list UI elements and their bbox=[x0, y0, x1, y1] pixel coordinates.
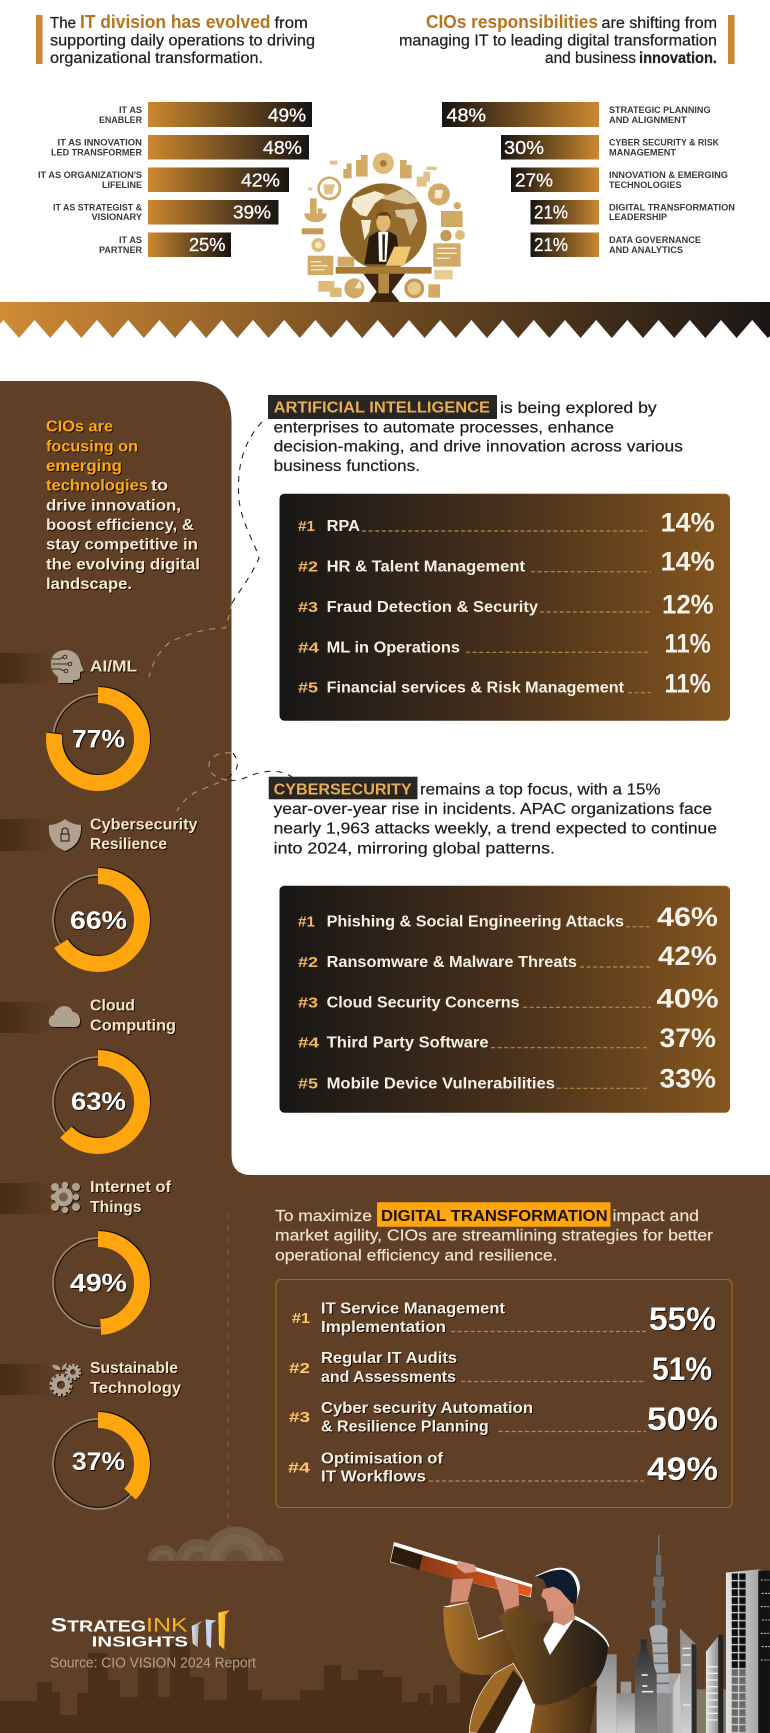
skyline silhouette bbox=[0, 1643, 490, 1733]
row: Mobile 33%: 33% bbox=[660, 1063, 716, 1093]
row: Fraud 12%: Fraud Detection & Security bbox=[327, 599, 538, 616]
text block: digital transformation: DIGITAL TRANSFORMATION bbox=[381, 1208, 608, 1225]
bar: cyber security 30%: MANAGEMENT bbox=[609, 148, 677, 158]
text block: digital transformation: market agility, CIOs are streamlining strategies for better bbox=[275, 1228, 713, 1245]
row: IT audits 51% bbox=[289, 1350, 712, 1387]
row: ML 11%: ML in Operations bbox=[327, 639, 460, 656]
row: IT service management 55%: 55% bbox=[649, 1301, 716, 1337]
row: Financial 11%: #5 bbox=[298, 680, 318, 697]
row: optimisation of IT workflows 49%: 49% bbox=[647, 1451, 718, 1487]
header: CIOs responsibilities shifting: CIOs responsibilities bbox=[426, 12, 598, 32]
text block: cybersecurity: nearly 1,963 attacks weekly, a trend expected to continue bbox=[274, 821, 717, 838]
row: Phishing 46%: 46% bbox=[657, 902, 718, 932]
row: Phishing 46% bbox=[298, 902, 718, 932]
text block: digital transformation: To maximize bbox=[275, 1208, 372, 1225]
panel: cybersecurity threats bbox=[280, 886, 730, 1113]
bar: digital transformation 21%: 21% bbox=[534, 202, 568, 223]
bar: data governance 21% bbox=[530, 232, 701, 257]
icon: gears and leaf bbox=[51, 1363, 80, 1395]
ring: 77% bbox=[53, 694, 143, 784]
vertical dashed divider bbox=[227, 1213, 229, 1529]
header: IT division evolved: The bbox=[50, 15, 76, 32]
row: HR 14%: 14% bbox=[661, 546, 715, 576]
intro text: emerging technologies: boost efficiency, & bbox=[46, 517, 194, 534]
bar: IT as partner 25%: PARTNER bbox=[99, 245, 143, 255]
row: cyber security automation 50%: Cyber security Automation bbox=[321, 1400, 533, 1417]
row: optimisation of IT workflows 49% bbox=[288, 1451, 718, 1487]
bar: innovation 27%: 27% bbox=[515, 170, 553, 190]
row: IT service management 55% bbox=[292, 1301, 716, 1337]
row: Cloud security 40% bbox=[298, 984, 718, 1014]
row: cyber security automation 50%: #3 bbox=[289, 1409, 310, 1426]
bar: data governance 21%: DATA GOVERNANCE bbox=[609, 235, 701, 245]
bar: strategic planning 48%: STRATEGIC PLANNING bbox=[609, 105, 711, 115]
bar: IT as organization's lifeline 42%: LIFELINE bbox=[102, 180, 142, 190]
row: Financial 11%: 11% bbox=[664, 669, 711, 699]
icon: IoT nodes bbox=[51, 1182, 80, 1213]
intro text: emerging technologies: landscape. bbox=[46, 576, 132, 593]
donut block: Cybersecurity Resilience 66%: Resilience bbox=[90, 836, 167, 853]
text block: cybersecurity: remains a top focus, with a 15% bbox=[420, 781, 661, 798]
ring: 37%: 37% bbox=[72, 1448, 125, 1476]
text block: cybersecurity: CYBERSECURITY bbox=[274, 781, 412, 798]
coat bbox=[443, 1602, 609, 1733]
bar: strategic planning 48%: AND ALIGNMENT bbox=[609, 115, 687, 125]
row: optimisation of IT workflows 49%: IT Workflows bbox=[321, 1469, 426, 1486]
icon: AI head bbox=[51, 650, 84, 683]
bar: digital transformation 21%: LEADERSHIP bbox=[609, 212, 667, 222]
logo: StrategINK Insights: INK bbox=[146, 1615, 188, 1637]
bar: data governance 21%: 21% bbox=[534, 234, 568, 255]
ring: 37% bbox=[53, 1419, 143, 1509]
row: Third party 37%: 37% bbox=[660, 1023, 716, 1053]
row: ML 11% bbox=[298, 629, 711, 659]
text block: artificial intelligence: enterprises to automate processes, enhance bbox=[274, 419, 614, 436]
bar: cyber security 30%: 30% bbox=[504, 137, 544, 158]
row: Third party 37%: #4 bbox=[298, 1035, 320, 1052]
donut block: Internet of Things 49% bbox=[0, 1179, 172, 1328]
bar: innovation 27%: INNOVATION & EMERGING bbox=[609, 170, 728, 180]
row: Mobile 33%: #5 bbox=[298, 1075, 318, 1092]
decorative cloud arcs bbox=[148, 1526, 284, 1561]
bar: strategic planning 48%: 48% bbox=[446, 104, 486, 126]
panel: AI use cases bbox=[280, 494, 730, 721]
row: RPA 14%: 14% bbox=[661, 508, 715, 538]
row: IT audits 51%: Regular IT Audits bbox=[321, 1350, 457, 1367]
ring: 49% bbox=[53, 1238, 143, 1328]
telescope bbox=[390, 1542, 532, 1597]
row: Cloud security 40%: Cloud Security Concerns bbox=[327, 994, 520, 1011]
text block: digital transformation: impact and bbox=[612, 1208, 699, 1225]
logo: StrategINK Insights: INSIGHTS bbox=[92, 1634, 188, 1650]
intro text: emerging technologies: emerging bbox=[46, 458, 122, 475]
row: cyber security automation 50%: & Resilience Planning bbox=[321, 1418, 489, 1435]
row: IT service management 55%: #1 bbox=[292, 1310, 310, 1327]
icon: shield bbox=[49, 819, 81, 851]
row: Third party 37% bbox=[298, 1023, 716, 1053]
donut block: Sustainable Technology 37%: Technology bbox=[90, 1380, 181, 1397]
intro text: emerging technologies: the evolving digital bbox=[46, 556, 200, 573]
header: CIOs responsibilities shifting: managing IT to leading digital transformation bbox=[399, 32, 717, 50]
row: Ransomware 42%: #2 bbox=[298, 954, 318, 971]
panel: digital transformation strategies bbox=[276, 1280, 732, 1508]
row: cyber security automation 50% bbox=[289, 1400, 718, 1437]
row: Financial 11%: Financial services & Risk Management bbox=[327, 680, 624, 697]
intro text: emerging technologies: drive innovation, bbox=[46, 497, 181, 514]
bar: IT as organization's lifeline 42% bbox=[38, 168, 289, 192]
row: Mobile 33% bbox=[298, 1063, 716, 1093]
row: Mobile 33%: Mobile Device Vulnerabilities bbox=[327, 1075, 555, 1092]
bar: cyber security 30% bbox=[501, 135, 720, 160]
logo: StrategINK Insights bbox=[51, 1610, 230, 1650]
row: Cloud security 40%: #3 bbox=[298, 994, 318, 1011]
text block: digital transformation bbox=[275, 1202, 713, 1264]
ring: 49%: 49% bbox=[70, 1269, 127, 1297]
bar: data governance 21%: AND ANALYTICS bbox=[609, 245, 683, 255]
row: Ransomware 42%: 42% bbox=[658, 941, 717, 971]
bar: innovation 27% bbox=[511, 168, 728, 192]
text block: artificial intelligence: business functions. bbox=[274, 458, 420, 475]
illustration: city skyscrapers bbox=[597, 1535, 770, 1733]
row: IT audits 51%: #2 bbox=[289, 1360, 310, 1377]
header: IT division evolved: supporting daily operations to driving bbox=[50, 32, 315, 50]
row: IT audits 51%: and Assessments bbox=[321, 1369, 456, 1386]
bar chart: CIO responsibilities bbox=[442, 102, 735, 257]
row: Cloud security 40%: 40% bbox=[656, 984, 718, 1014]
row: ML 11%: #4 bbox=[298, 639, 320, 656]
ring: 63% bbox=[53, 1057, 143, 1147]
bar: IT as innovation led transformer 48%: LED TRANSFORMER bbox=[51, 148, 143, 158]
row: Ransomware 42% bbox=[298, 941, 717, 971]
row: IT service management 55%: Implementation bbox=[321, 1319, 446, 1336]
intro text: emerging technologies: technologies bbox=[46, 478, 148, 495]
header: CIOs responsibilities shifting: and business bbox=[545, 50, 636, 67]
illustration: man with telescope bbox=[390, 1542, 609, 1733]
text block: cybersecurity: into 2024, mirroring global patterns. bbox=[274, 840, 555, 857]
ring: 66%: 66% bbox=[70, 907, 127, 935]
zigzag divider band bbox=[0, 302, 770, 338]
donut block: Cybersecurity Resilience 66% bbox=[0, 816, 198, 965]
donut block: Cloud Computing 63%: Cloud bbox=[90, 998, 135, 1015]
row: HR 14%: HR & Talent Management bbox=[327, 559, 525, 576]
row: IT audits 51%: 51% bbox=[652, 1351, 712, 1387]
header: IT division evolved bbox=[36, 12, 315, 67]
donut block: Sustainable Technology 37% bbox=[0, 1360, 181, 1509]
text block: artificial intelligence: ARTIFICIAL INTELLIGENCE bbox=[274, 400, 490, 417]
text block: artificial intelligence bbox=[268, 395, 683, 475]
text block: cybersecurity bbox=[269, 777, 717, 857]
row: RPA 14%: #1 bbox=[298, 518, 315, 535]
bar: IT as enabler 49%: ENABLER bbox=[99, 115, 143, 125]
icon: logo bars bbox=[192, 1610, 230, 1649]
row: RPA 14%: RPA bbox=[327, 518, 360, 535]
bar: IT as strategist and visionary 39% bbox=[53, 200, 278, 224]
bar: IT as strategist and visionary 39%: IT AS STRATEGIST & bbox=[53, 202, 143, 212]
connector: AI dashed curve bbox=[149, 422, 262, 677]
bar: digital transformation 21% bbox=[530, 200, 735, 224]
bar: IT as strategist and visionary 39%: VISIONARY bbox=[92, 212, 142, 222]
bar: IT as partner 25%: IT AS bbox=[119, 235, 142, 245]
bar: IT as enabler 49%: 49% bbox=[268, 104, 306, 126]
intro text: emerging technologies: to bbox=[151, 478, 168, 495]
header: CIOs responsibilities shifting bbox=[399, 12, 734, 67]
bar: IT as organization's lifeline 42%: IT AS ORGANIZATION'S bbox=[38, 170, 142, 180]
bar: IT as innovation led transformer 48%: IT AS INNOVATION bbox=[58, 138, 142, 148]
bar: IT as organization's lifeline 42%: 42% bbox=[241, 170, 280, 190]
bar: IT as innovation led transformer 48% bbox=[51, 135, 309, 160]
bar: strategic planning 48% bbox=[442, 102, 711, 127]
brown background panel bbox=[0, 381, 770, 1733]
row: Fraud 12% bbox=[298, 589, 714, 619]
ring: 77%: 77% bbox=[72, 725, 125, 753]
bar: IT as innovation led transformer 48%: 48% bbox=[263, 137, 302, 158]
intro text: emerging technologies bbox=[46, 419, 200, 593]
bar: IT as partner 25%: 25% bbox=[189, 234, 226, 255]
bar: IT as enabler 49%: IT AS bbox=[119, 105, 142, 115]
logo: StrategINK Insights: STRATEG bbox=[51, 1615, 146, 1637]
icon: cloud bbox=[49, 1006, 80, 1027]
bar: IT as strategist and visionary 39%: 39% bbox=[233, 202, 271, 223]
ring: 66% bbox=[53, 875, 143, 965]
illustration: executive at desk with globe and icons bbox=[302, 153, 465, 302]
row: Fraud 12%: 12% bbox=[662, 589, 714, 619]
bar chart: IT division roles bbox=[38, 102, 312, 257]
row: ML 11%: 11% bbox=[664, 629, 711, 659]
header: IT division evolved: organizational transformation. bbox=[50, 50, 263, 67]
bar: innovation 27%: TECHNOLOGIES bbox=[609, 180, 682, 190]
row: Financial 11% bbox=[298, 669, 711, 699]
donut block: Internet of Things 49%: Things bbox=[90, 1199, 142, 1216]
intro text: emerging technologies: focusing on bbox=[46, 438, 138, 455]
row: Third party 37%: Third Party Software bbox=[327, 1035, 489, 1052]
header: CIOs responsibilities shifting: are shifting from bbox=[602, 15, 717, 32]
bar: IT as partner 25% bbox=[99, 232, 231, 257]
donut block: Internet of Things 49%: Internet of bbox=[90, 1179, 172, 1196]
connector: cybersecurity dashed curve bbox=[177, 753, 292, 811]
row: RPA 14% bbox=[298, 508, 715, 538]
donut block: Cloud Computing 63%: Computing bbox=[90, 1017, 176, 1034]
bar: digital transformation 21%: DIGITAL TRANSFORMATION bbox=[609, 202, 735, 212]
row: Ransomware 42%: Ransomware & Malware Threats bbox=[327, 954, 577, 971]
row: HR 14% bbox=[298, 546, 715, 576]
donut block: Cloud Computing 63% bbox=[0, 998, 176, 1147]
row: IT service management 55%: IT Service Management bbox=[321, 1301, 505, 1318]
head bbox=[535, 1568, 580, 1626]
intro text: emerging technologies: stay competitive in bbox=[46, 537, 198, 554]
ring: 63%: 63% bbox=[71, 1088, 126, 1116]
donut block: Cybersecurity Resilience 66%: Cybersecurity bbox=[90, 816, 198, 833]
row: Fraud 12%: #3 bbox=[298, 599, 318, 616]
row: Phishing 46%: #1 bbox=[298, 914, 315, 931]
header: IT division evolved: IT division has evolved bbox=[80, 12, 270, 32]
text block: digital transformation: operational efficiency and resilience. bbox=[275, 1248, 558, 1264]
row: optimisation of IT workflows 49%: Optimisation of bbox=[321, 1451, 444, 1468]
row: optimisation of IT workflows 49%: #4 bbox=[288, 1460, 311, 1477]
row: cyber security automation 50%: 50% bbox=[647, 1401, 718, 1437]
donut block: AI/ML 77% bbox=[0, 650, 143, 784]
intro text: emerging technologies: CIOs are bbox=[46, 419, 113, 436]
header: IT division evolved: from bbox=[274, 15, 308, 32]
donut block: AI/ML 77%: AI/ML bbox=[90, 659, 137, 676]
text block: artificial intelligence: decision-making, and drive innovation across various bbox=[274, 439, 683, 456]
header: CIOs responsibilities shifting: innovation. bbox=[639, 50, 717, 67]
bar: cyber security 30%: CYBER SECURITY & RISK bbox=[609, 138, 720, 148]
text block: cybersecurity: year-over-year rise in incidents. APAC organizations face bbox=[274, 801, 712, 818]
text block: artificial intelligence: is being explored by bbox=[500, 400, 657, 417]
bar: IT as enabler 49% bbox=[99, 102, 312, 127]
donut block: Sustainable Technology 37%: Sustainable bbox=[90, 1360, 178, 1377]
row: Phishing 46%: Phishing & Social Engineering Attacks bbox=[327, 914, 624, 931]
row: HR 14%: #2 bbox=[298, 559, 318, 576]
source line: Source: CIO VISION 2024 Report bbox=[50, 1656, 256, 1672]
